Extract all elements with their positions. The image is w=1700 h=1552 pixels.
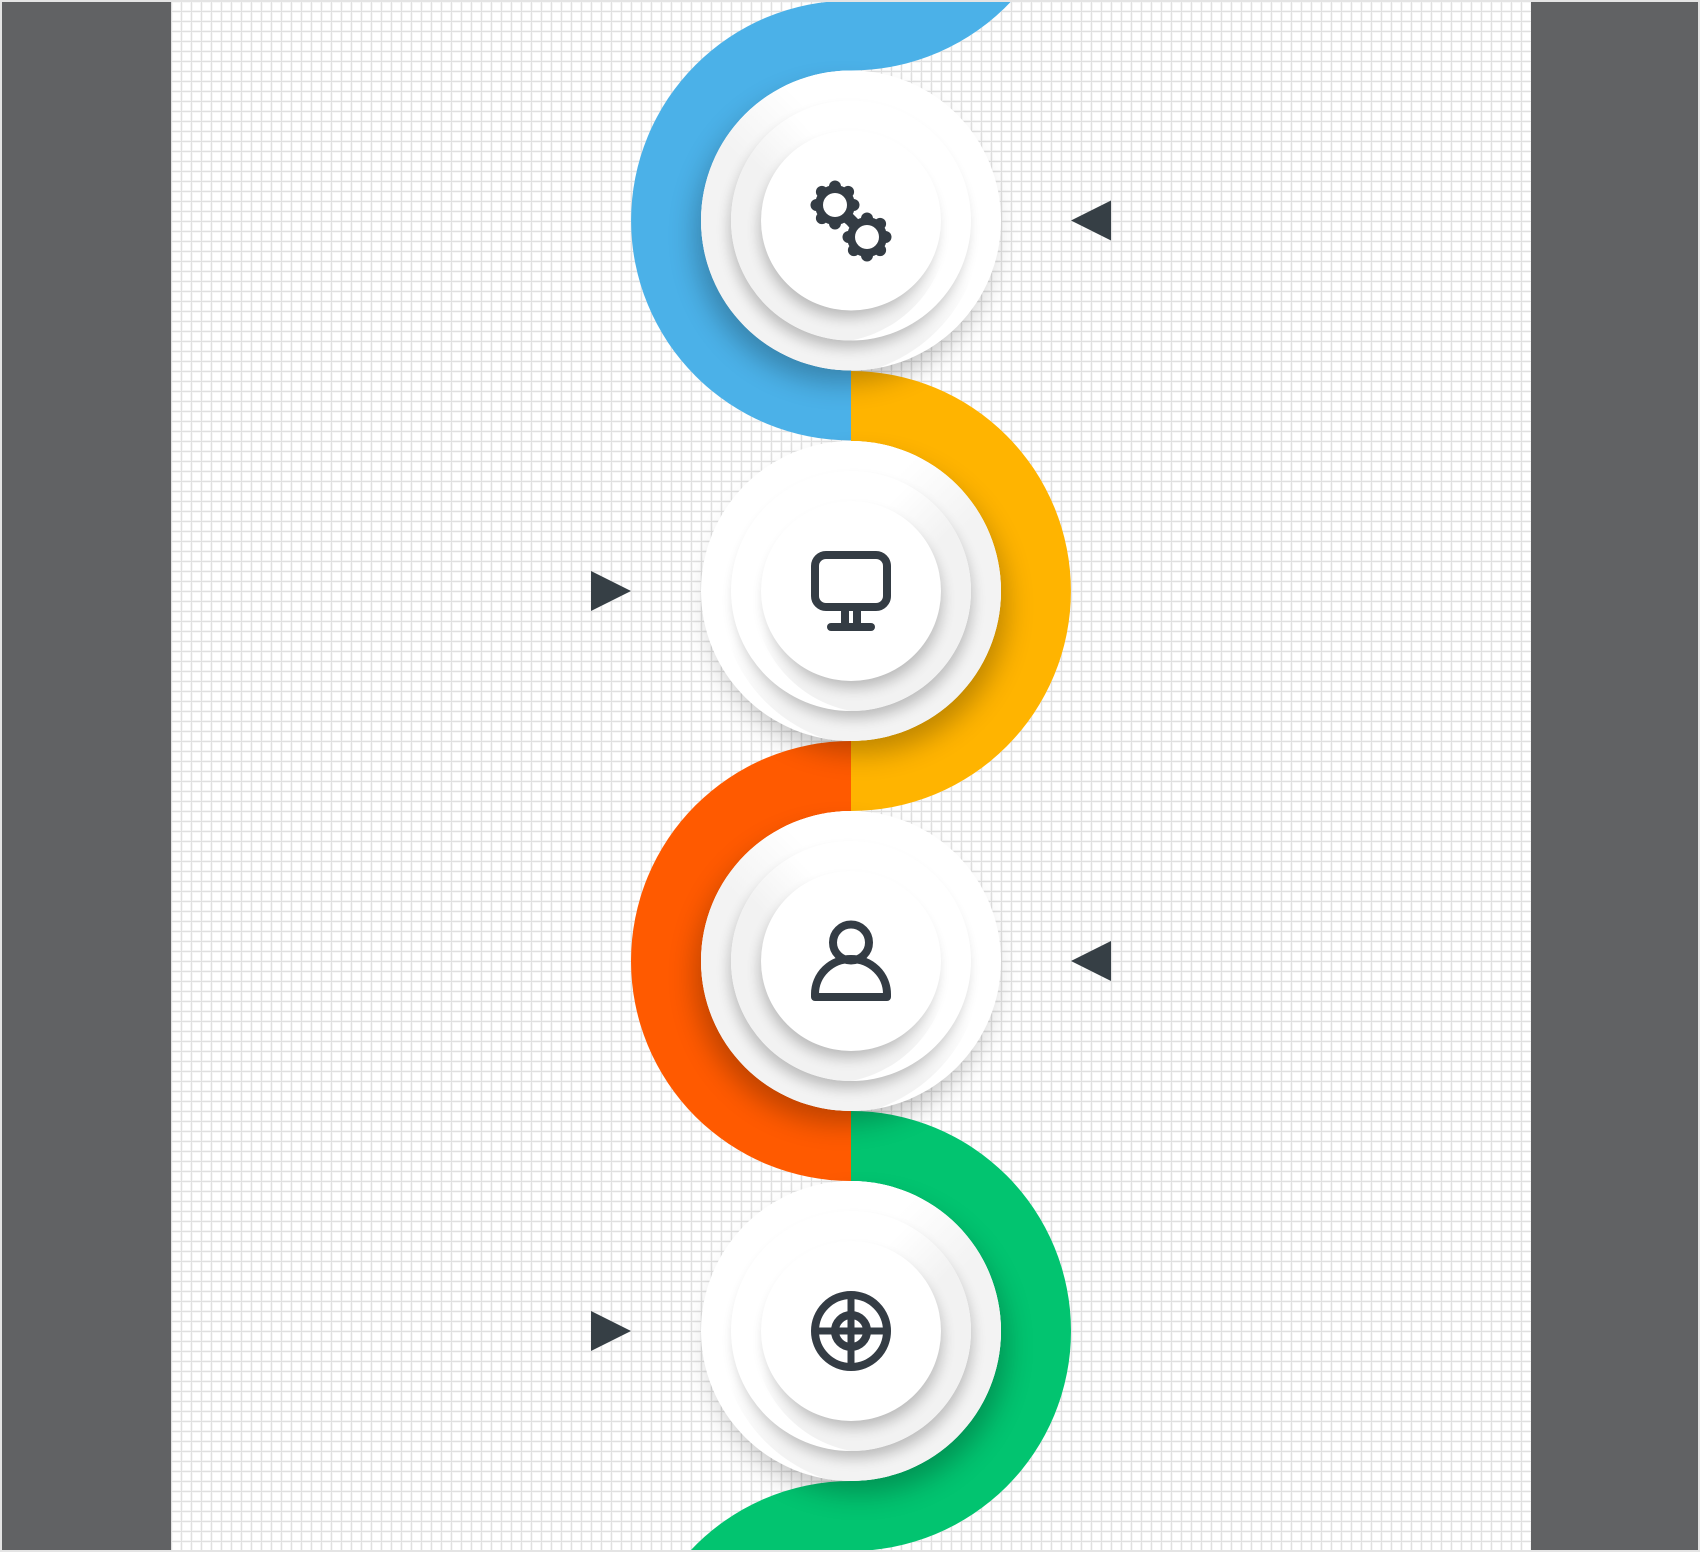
- icon: gears: [810, 180, 892, 262]
- arrow: step 4 pointer: [591, 1311, 631, 1351]
- wave band: green: [690, 1111, 1071, 1551]
- icon: person: [815, 924, 887, 997]
- icon: target: [815, 1295, 887, 1367]
- arrow: step 2 pointer: [591, 571, 631, 611]
- right dark side bar: [1531, 2, 1698, 1550]
- step 1 disc: [672, 66, 1001, 382]
- left dark side bar: [2, 2, 171, 1550]
- step 3 disc: [672, 807, 1001, 1123]
- step 2 disc: [701, 437, 1030, 753]
- arrow: step 1 pointer: [1071, 200, 1111, 240]
- step 4 disc: [701, 1177, 1030, 1493]
- wave band: yellow: [851, 371, 1071, 811]
- icon: monitor: [815, 555, 887, 627]
- wave band: orange: [631, 741, 851, 1181]
- arrow: step 3 pointer: [1071, 941, 1111, 981]
- grid background panel: [171, 2, 1531, 1550]
- wave band: blue: [631, 0, 1012, 440]
